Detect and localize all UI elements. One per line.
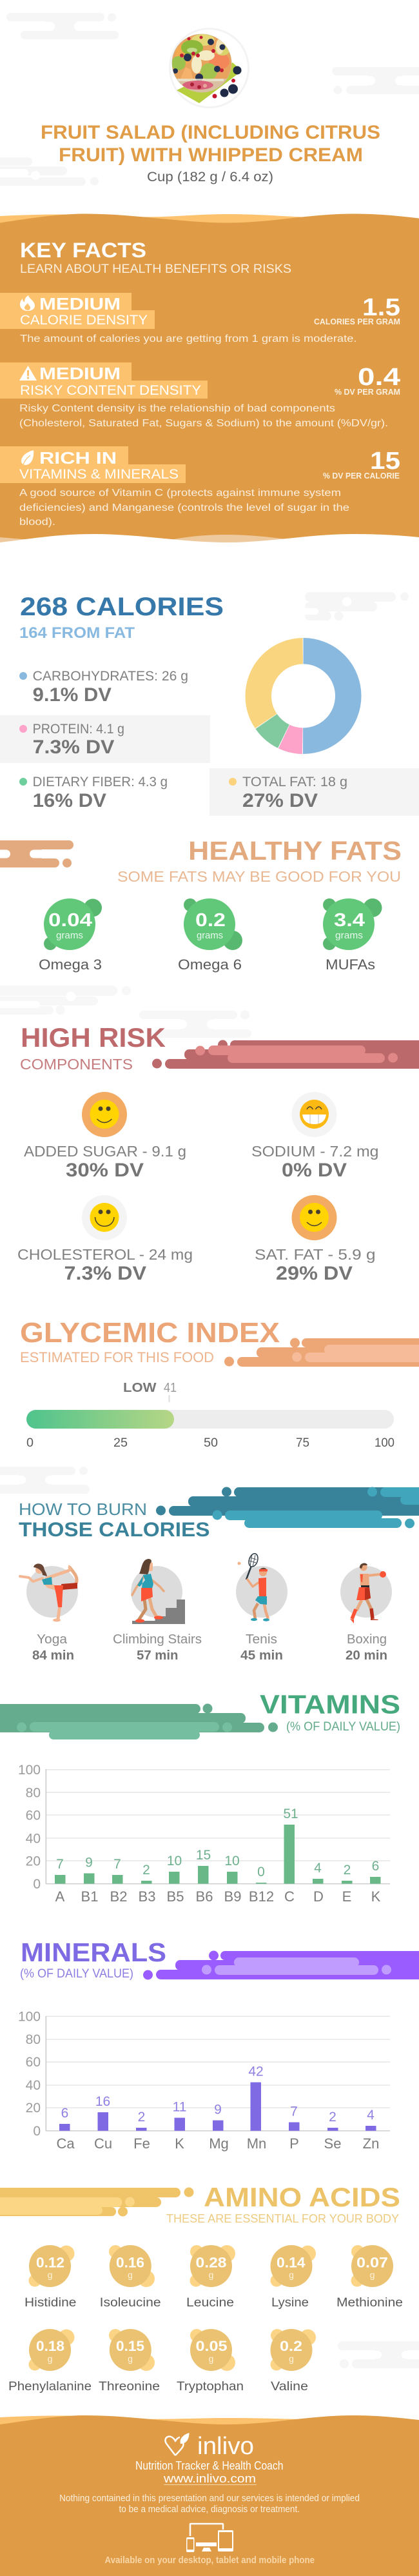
bar chart: vitamins: 4 [314, 1861, 322, 1876]
decorative header bars [0, 840, 73, 867]
amino: methionine: 0.07 [356, 2255, 388, 2270]
bar chart: vitamins: 7 [56, 1857, 64, 1872]
gauge scale [26, 1436, 395, 1450]
bar chart: minerals: Mn [247, 2135, 266, 2152]
wave bottom of key facts [0, 534, 419, 548]
bar chart: vitamins: 100 [18, 1763, 41, 1778]
activity: yoga: Yoga [37, 1632, 68, 1647]
amino: threonine: Threonine [99, 2379, 160, 2393]
calories from fat: 164 FROM FAT [19, 624, 135, 642]
fact: rich in vitamins and minerals [0, 446, 400, 528]
bar chart: minerals: 9 [214, 2103, 222, 2117]
bar chart: vitamins: 80 [26, 1785, 41, 1801]
activity: boxing: 20 min [346, 1648, 387, 1663]
amino: methionine: Methionine [336, 2295, 403, 2310]
fact: calorie density: MEDIUM [39, 295, 121, 313]
fact: rich in vitamins and minerals: blood). [19, 517, 55, 528]
bar chart: minerals: 7 [290, 2104, 298, 2119]
logo: inlivo: inlivo [197, 2433, 254, 2460]
activity: climbing stairs: 57 min [137, 1648, 178, 1663]
bar chart: vitamins: 60 [26, 1808, 41, 1823]
bar chart: vitamins: 9 [85, 1855, 93, 1870]
risk: cholesterol: 7.3% DV [64, 1263, 146, 1284]
glycemic gauge bar [26, 1410, 394, 1429]
title [41, 122, 380, 166]
bar chart: vitamins: B2 [110, 1888, 127, 1905]
healthy fats subheading: SOME FATS MAY BE GOOD FOR YOU [117, 868, 401, 885]
risk: added sugar: ADDED SUGAR - 9.1 g [24, 1143, 186, 1160]
macro: total fat: TOTAL FAT: 18 g [242, 775, 347, 789]
glycemic value label: LOW [123, 1380, 157, 1395]
fact: rich in vitamins and minerals: deficiencies) and Manganese (controls the level of sugar in the [19, 502, 349, 513]
panel: minerals [18, 1937, 419, 2152]
amino: tryptophan [177, 2329, 244, 2393]
serving size: Cup (182 g / 6.4 oz) [147, 169, 273, 184]
fat: omega 3: 0.04 [48, 910, 92, 931]
bar chart: minerals: 100 [18, 2010, 41, 2024]
panel: high risk components [17, 1022, 419, 1284]
footer wave [0, 2415, 419, 2576]
bar chart: vitamins: 40 [26, 1832, 41, 1846]
key facts heading: KEY FACTS [20, 239, 146, 262]
fact: rich in vitamins and minerals: VITAMINS & MINERALS [19, 467, 179, 482]
minerals subheading: (% OF DAILY VALUE) [20, 1967, 133, 1981]
gauge scale: 75 [296, 1436, 309, 1450]
decorative header bars [143, 1950, 419, 1980]
icon: warning triangle [19, 366, 37, 381]
icon: leaf [21, 450, 34, 465]
bar chart: minerals: Mg [209, 2135, 229, 2152]
bar chart: vitamins: B6 [196, 1888, 213, 1905]
disclaimer [59, 2493, 360, 2515]
website link: www.inlivo.com [163, 2472, 256, 2485]
bar chart: vitamins: 0 [33, 1877, 41, 1892]
icon: flame [20, 295, 35, 311]
activity: tennis [236, 1552, 287, 1663]
fact: risky content density: RISKY CONTENT DENSITY [20, 383, 201, 398]
panel: vitamins [0, 1690, 400, 1905]
fact: calorie density [0, 293, 400, 344]
panel: key facts [0, 214, 419, 548]
amino: isoleucine: Isoleucine [100, 2295, 161, 2310]
fat: omega 6: grams [197, 930, 223, 941]
activity: boxing [340, 1563, 392, 1663]
amino: tryptophan: 0.05 [196, 2338, 227, 2354]
bar chart: vitamins: B3 [139, 1888, 155, 1905]
background clouds: header [0, 13, 419, 186]
amino: phenylalanine: 0.18 [36, 2338, 64, 2354]
panel: how to burn those calories [19, 1487, 419, 1663]
calories heading: 268 CALORIES [20, 593, 224, 621]
macro: carbohydrates [19, 669, 188, 706]
donut chart [258, 651, 348, 741]
bar chart: minerals: 40 [26, 2078, 41, 2093]
bar chart: minerals: Se [324, 2135, 341, 2152]
fact: calorie density: CALORIES PER GRAM [314, 317, 400, 326]
bar chart: vitamins: 15 [196, 1848, 211, 1863]
macro: dietary fiber: 16% DV [33, 790, 106, 811]
amino: histidine: Histidine [24, 2295, 76, 2310]
bar chart: minerals: P [289, 2135, 299, 2152]
bar chart: vitamins: B5 [167, 1888, 184, 1905]
macro: carbohydrates: CARBOHYDRATES: 26 g [33, 669, 188, 684]
icon: boxing figure [350, 1563, 386, 1623]
fact: risky content density: Risky Content density is the relationship of bad components [19, 403, 335, 414]
amino: isoleucine: 0.16 [116, 2255, 144, 2270]
fact: rich in vitamins and minerals: % DV PER CALORIE [323, 471, 400, 481]
amino: tryptophan: Tryptophan [177, 2379, 244, 2393]
bar chart: minerals: 42 [248, 2064, 264, 2079]
bar chart: vitamins: B1 [81, 1888, 98, 1905]
decorative header bars [156, 1487, 419, 1529]
fact: risky content density: 0.4 [358, 364, 400, 391]
bar chart: minerals: 16 [95, 2094, 110, 2109]
amino: isoleucine: g [128, 2270, 133, 2280]
macro: protein: 7.3% DV [33, 737, 115, 758]
activity: yoga [20, 1563, 78, 1663]
bar chart: minerals: 0 [33, 2124, 41, 2139]
disclaimer: Nothing contained in this presentation and our services is intended or implied [59, 2493, 360, 2504]
fact: calorie density: CALORIE DENSITY [20, 313, 148, 328]
risk: cholesterol: CHOLESTEROL - 24 mg [17, 1246, 193, 1263]
macro: total fat: 27% DV [242, 790, 318, 811]
bar chart: vitamins: 2 [142, 1863, 150, 1878]
bar chart: vitamins: B12 [249, 1888, 274, 1905]
amino: phenylalanine: Phenylalanine [8, 2379, 92, 2393]
fact: rich in vitamins and minerals: 15 [370, 448, 400, 475]
high risk heading: HIGH RISK [21, 1022, 166, 1053]
bar chart: vitamins: K [371, 1888, 381, 1905]
amino: threonine: 0.15 [116, 2338, 144, 2354]
title: FRUIT SALAD (INCLUDING CITRUS [41, 122, 380, 143]
bar chart: minerals: 2 [138, 2110, 145, 2125]
amino: lysine: 0.14 [277, 2255, 306, 2270]
amino: valine: Valine [271, 2379, 308, 2393]
amino: lysine [271, 2245, 316, 2310]
macro: carbohydrates: 9.1% DV [33, 684, 112, 706]
bar chart: vitamins: B9 [224, 1888, 241, 1905]
amino: isoleucine [100, 2245, 161, 2310]
fact: risky content density [0, 362, 400, 429]
panel: calories [0, 592, 419, 816]
decorative header bars [152, 1040, 419, 1069]
fact: rich in vitamins and minerals: RICH IN [39, 450, 117, 468]
amino: histidine: g [48, 2270, 52, 2280]
risk: sodium [251, 1092, 379, 1181]
background clouds: high risk [0, 986, 251, 1038]
fat: MUFAs [323, 898, 382, 973]
icon: tennis figure [237, 1552, 269, 1621]
amino: methionine [336, 2245, 403, 2310]
background cloud: burn calories [0, 1467, 90, 1494]
panel: healthy fats [0, 836, 402, 973]
risk: sodium: 0% DV [282, 1160, 347, 1181]
bar chart: vitamins: 0 [257, 1865, 265, 1879]
tagline: Nutrition Tracker & Health Coach [135, 2459, 284, 2472]
fat: MUFAs: grams [335, 930, 363, 941]
risk: cholesterol [17, 1195, 193, 1284]
minerals heading: MINERALS [21, 1937, 166, 1967]
bar chart: minerals: 80 [26, 2032, 41, 2047]
amino: valine: g [289, 2353, 294, 2364]
bar chart: vitamins: 20 [26, 1854, 41, 1869]
bar chart: vitamins [18, 1763, 390, 1905]
fact: risky content density: (Cholesterol, Saturated Fat, Sugars & Sodium) to the amount (%DV/gr). [19, 418, 388, 429]
bar chart: minerals: 60 [26, 2055, 41, 2070]
risk: saturated fat: 29% DV [276, 1263, 353, 1284]
bar chart: minerals: Ca [56, 2135, 75, 2152]
healthy fats heading: HEALTHY FATS [188, 836, 402, 866]
activity: climbing stairs [113, 1559, 202, 1663]
bar chart: vitamins: 51 [283, 1807, 298, 1821]
bar chart: minerals: 20 [26, 2101, 41, 2115]
bar chart: vitamins: 10 [167, 1854, 182, 1868]
bar chart: vitamins: 2 [344, 1863, 351, 1878]
bar chart: vitamins: 7 [113, 1857, 121, 1872]
activity: yoga: 84 min [32, 1648, 74, 1663]
key facts subheading: LEARN ABOUT HEALTH BENEFITS OR RISKS [20, 263, 291, 276]
fact: risky content density: MEDIUM [39, 365, 121, 383]
amino: lysine: g [289, 2270, 294, 2280]
logo: inlivo [166, 2433, 254, 2460]
bar chart: minerals: 2 [329, 2110, 336, 2125]
macro: total fat [210, 768, 419, 816]
background cloud: amino acids [338, 2341, 419, 2368]
bar chart: vitamins: D [313, 1888, 324, 1905]
icon: yoga figure [20, 1563, 77, 1621]
amino: histidine: 0.12 [36, 2255, 64, 2270]
gauge scale: 100 [375, 1436, 395, 1450]
amino: leucine [186, 2245, 235, 2310]
fact: rich in vitamins and minerals: A good source of Vitamin C (protects against immune system [19, 488, 341, 499]
bar chart: vitamins: 6 [372, 1859, 379, 1874]
burn heading line 2: THOSE CALORIES [19, 1518, 210, 1541]
vitamins subheading: (% OF DAILY VALUE) [286, 1719, 400, 1734]
decorative header bars [0, 2188, 193, 2216]
amino: lysine: Lysine [271, 2295, 309, 2310]
macro: protein [0, 715, 210, 763]
panel: footer [0, 2415, 419, 2576]
fat: MUFAs: MUFAs [326, 956, 375, 973]
panel: amino acids [0, 2182, 403, 2393]
activity: climbing stairs: Climbing Stairs [113, 1632, 202, 1647]
amino acids subheading: THESE ARE ESSENTIAL FOR YOUR BODY [166, 2212, 399, 2225]
activity: tennis: 45 min [240, 1648, 283, 1663]
food photo: fruit salad bowl [170, 28, 249, 107]
glycemic index heading: GLYCEMIC INDEX [20, 1317, 280, 1349]
icon: devices [186, 2524, 233, 2552]
amino acids heading: AMINO ACIDS [204, 2182, 400, 2212]
background cloud [297, 592, 409, 620]
bar chart: minerals [18, 2010, 390, 2152]
glycemic value label [123, 1380, 177, 1402]
bar chart: vitamins: A [55, 1888, 65, 1905]
decorative header bars [0, 1704, 278, 1739]
bar chart: minerals: Cu [94, 2135, 112, 2152]
fact: calorie density: 1.5 [362, 294, 400, 321]
bar chart: minerals: 6 [61, 2106, 68, 2121]
activity: tennis: Tenis [246, 1632, 277, 1647]
fat: omega 6 [178, 898, 242, 973]
vitamins heading: VITAMINS [260, 1690, 400, 1719]
wave top of key facts [0, 214, 419, 542]
gauge scale: 0 [26, 1436, 34, 1450]
risk: saturated fat: SAT. FAT - 5.9 g [255, 1246, 375, 1263]
amino: valine [271, 2329, 316, 2393]
icon: stairs figure [132, 1559, 185, 1624]
amino: leucine: g [209, 2270, 213, 2280]
decorative header bars [224, 1338, 419, 1367]
high risk subheading: COMPONENTS [20, 1056, 133, 1073]
bar chart: minerals: 11 [173, 2100, 186, 2114]
amino: phenylalanine: g [48, 2353, 52, 2364]
fat: omega 6: 0.2 [195, 910, 226, 931]
gauge scale: 25 [113, 1436, 128, 1450]
bar chart: minerals: 4 [367, 2108, 375, 2123]
amino: histidine [24, 2245, 76, 2310]
title: FRUIT) WITH WHIPPED CREAM [59, 144, 363, 166]
amino: methionine: g [370, 2270, 375, 2280]
macro: protein: PROTEIN: 4.1 g [33, 722, 124, 737]
fat: omega 3 [39, 898, 102, 973]
bar chart: vitamins: E [342, 1888, 351, 1905]
bar chart: vitamins: C [284, 1888, 295, 1905]
bar chart: minerals: Zn [363, 2135, 379, 2152]
burn heading line 1: HOW TO BURN [19, 1500, 147, 1519]
gauge scale: 50 [204, 1436, 218, 1450]
bar chart: vitamins: 10 [224, 1854, 240, 1868]
amino: leucine: 0.28 [196, 2255, 227, 2270]
panel: glycemic index [20, 1317, 419, 1450]
activity: boxing: Boxing [347, 1632, 387, 1647]
fat: MUFAs: 3.4 [334, 910, 365, 931]
macro: dietary fiber: DIETARY FIBER: 4.3 g [33, 775, 168, 789]
fat: omega 3: grams [56, 930, 83, 941]
amino: valine: 0.2 [280, 2338, 302, 2354]
amino: phenylalanine [8, 2329, 92, 2393]
fact: calorie density: The amount of calories you are getting from 1 gram is moderate. [20, 333, 357, 344]
amino: tryptophan: g [209, 2353, 213, 2364]
amino: threonine: g [128, 2353, 133, 2364]
availability note: Available on your desktop, tablet and mobile phone [104, 2555, 315, 2566]
disclaimer: to be a medical advice, diagnosis or treatment. [119, 2504, 300, 2515]
fat: omega 6: Omega 6 [178, 956, 242, 973]
amino: leucine: Leucine [186, 2295, 234, 2310]
glycemic value label: 41 [164, 1380, 177, 1395]
fat: omega 3: Omega 3 [39, 956, 102, 973]
fact: risky content density: % DV PER GRAM [335, 388, 400, 397]
bar chart: minerals: Fe [133, 2135, 150, 2152]
amino: threonine [99, 2329, 160, 2393]
risk: sodium: SODIUM - 7.2 mg [251, 1143, 379, 1160]
glycemic index subheading: ESTIMATED FOR THIS FOOD [20, 1349, 214, 1365]
bar chart: minerals: K [175, 2135, 184, 2152]
risk: added sugar: 30% DV [66, 1160, 144, 1181]
risk: added sugar [24, 1092, 186, 1181]
macro: dietary fiber [19, 775, 168, 811]
risk: saturated fat [255, 1195, 375, 1284]
